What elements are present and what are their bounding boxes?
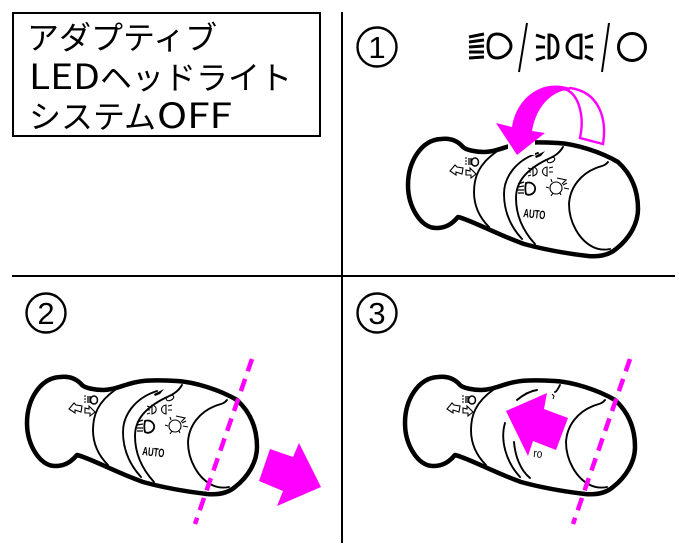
title box: OFF [157,88,232,139]
step number 3: 3 [368,296,386,331]
title box: アダプティブ [27,13,217,59]
panel 2 [26,294,321,524]
panel 3 [358,294,635,524]
step number 1: 1 [368,30,386,65]
headlight stalk switch [408,139,638,256]
panel 1 [358,23,646,256]
headlight mode icons [469,23,646,72]
step number 3 [358,294,396,332]
title box [13,13,320,139]
step number 1 [358,28,396,66]
headlight stalk switch: AUTO [523,206,546,222]
title box: LED [29,49,100,100]
step number 2: 2 [37,296,55,331]
step number 2 [26,294,66,332]
pull arrow [259,443,321,506]
headlight stalk switch [27,377,257,494]
rotation arrow [496,86,604,155]
headlight stalk switch [405,377,635,494]
title box: システム [29,92,156,138]
push arrow [506,393,568,456]
dashed pull line [573,359,630,524]
headlight stalk switch: ro [533,446,543,461]
title box: ヘッドライト [100,53,292,99]
headlight stalk switch: AUTO [142,444,165,460]
white gap in outline behind arrow [508,135,535,155]
dashed pull line [195,359,252,524]
